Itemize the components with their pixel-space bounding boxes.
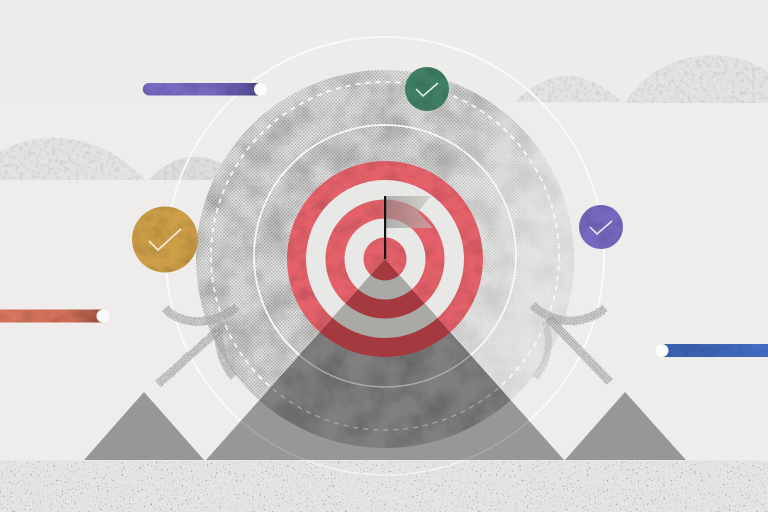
hills: left bbox=[0, 138, 240, 180]
ground speckles bbox=[0, 461, 768, 512]
halftone moon bbox=[196, 70, 574, 448]
dashed white ring bbox=[211, 82, 559, 430]
large mountain bbox=[206, 259, 564, 460]
blue progress bar bbox=[656, 344, 768, 357]
icon: purple check badge bbox=[579, 205, 623, 249]
red progress bar bbox=[0, 310, 110, 322]
ground bbox=[0, 460, 768, 512]
left small mountain bbox=[84, 392, 204, 460]
left arrows bbox=[158, 307, 237, 384]
right small mountain bbox=[565, 392, 686, 460]
target backing disk bbox=[287, 161, 483, 357]
icon: gold check badge bbox=[132, 206, 198, 272]
red target rings bbox=[287, 161, 483, 332]
flag bbox=[384, 196, 433, 259]
purple progress bar bbox=[143, 83, 267, 96]
upper background band bbox=[0, 0, 768, 103]
inner white ring bbox=[254, 125, 516, 387]
icon: green check badge bbox=[405, 67, 449, 111]
right arrows bbox=[533, 305, 610, 382]
outer ring crossing the ground bbox=[308, 461, 462, 475]
hills: upper right bbox=[515, 55, 768, 103]
outer white ring bbox=[166, 37, 604, 475]
